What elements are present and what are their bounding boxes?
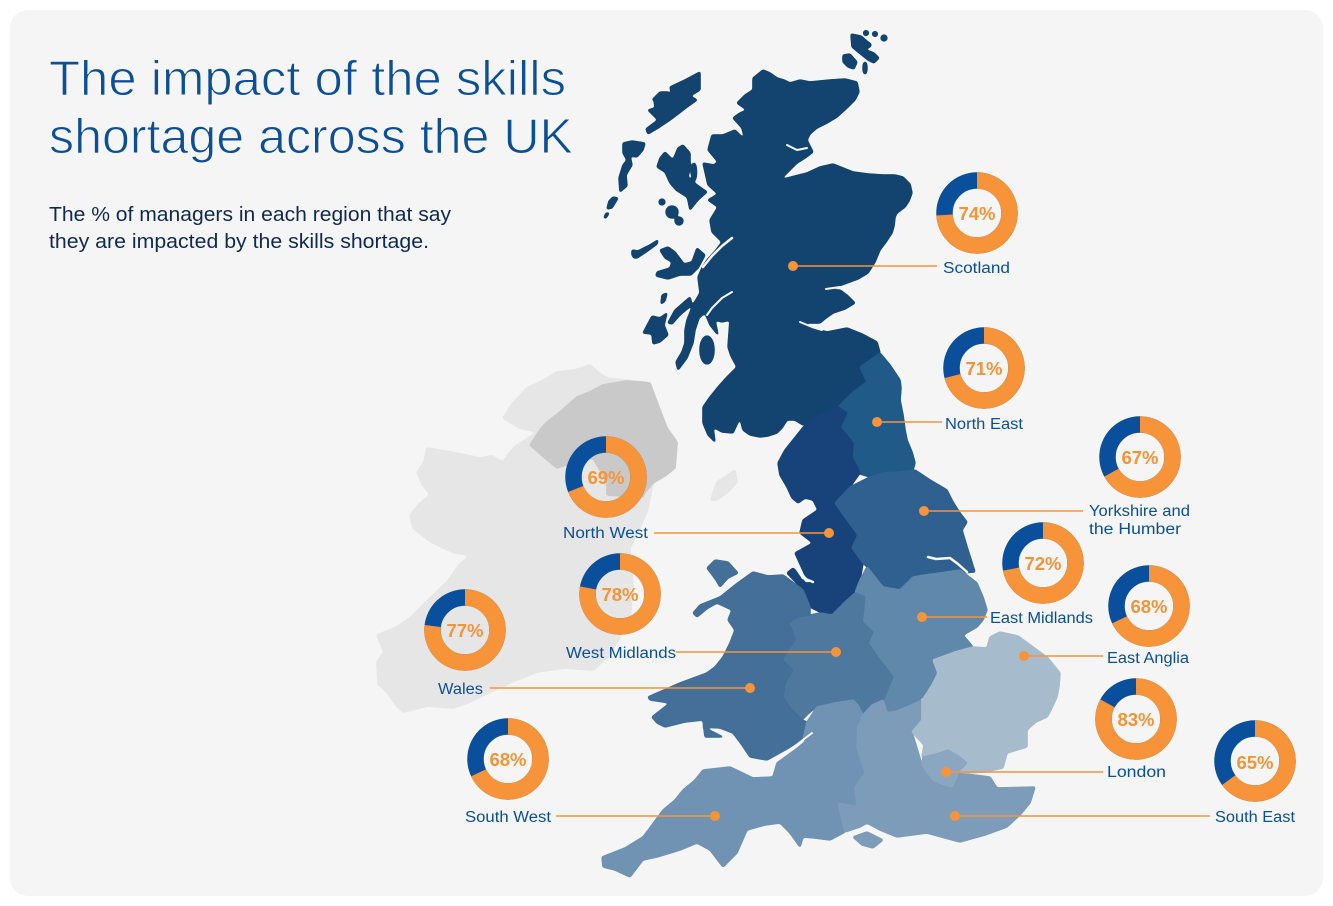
donut: East Anglia 68%: 68% (1130, 596, 1168, 617)
donut: West Midlands 78%: 78% (601, 584, 639, 605)
donut: Wales 77% (432, 598, 498, 662)
label: London: London (1107, 764, 1166, 781)
leader: Wales (490, 683, 755, 693)
donut: South East 65%: 65% (1236, 752, 1274, 773)
region: Northern Ireland (530, 381, 677, 497)
leader: South West (556, 811, 720, 821)
estuaries and sea lochs (703, 145, 967, 757)
island: Skye (657, 145, 707, 210)
leader: East Midlands (917, 612, 987, 622)
island: Jura (661, 293, 692, 324)
subtitle: they are impacted by the skills shortage. (49, 231, 429, 253)
region: East Midlands (855, 567, 987, 713)
map: Ireland (377, 365, 737, 712)
leader: North West (654, 528, 834, 538)
donut: Yorkshire and the Humber 67% (1108, 424, 1172, 490)
donut: North East 71%: 71% (965, 358, 1003, 379)
region: East Anglia (912, 632, 1060, 773)
label: Scotland: Scotland (943, 260, 1010, 277)
donut: West Midlands 78% (588, 562, 652, 626)
island: Orkney (843, 30, 887, 74)
region: North East (838, 353, 915, 477)
label: East Anglia: East Anglia (1107, 650, 1189, 667)
label: South East: South East (1215, 809, 1296, 826)
title (49, 52, 573, 164)
island: Lewis and Harris (646, 72, 700, 134)
island: Islay (643, 313, 668, 344)
title: shortage across the UK (49, 110, 573, 164)
region: South East (838, 700, 1035, 842)
donut: Yorkshire and the Humber 67%: 67% (1121, 447, 1159, 468)
donut: North West 69% (574, 444, 638, 510)
donut: North East 71% (952, 336, 1016, 400)
donut: South West 68%: 68% (489, 749, 527, 770)
region: North West (778, 407, 863, 615)
label: North East: North East (945, 416, 1024, 433)
label: North West: North West (563, 525, 649, 542)
region: Wales (648, 560, 810, 760)
leader: Yorkshire and the Humber (919, 506, 1083, 516)
leader: London (941, 767, 1103, 777)
region: Yorkshire and the Humber (835, 470, 975, 590)
map: Great Britain regions (602, 30, 1060, 877)
region: Republic of Ireland (377, 365, 677, 712)
leader: Scotland (788, 261, 937, 271)
label: East Midlands: East Midlands (990, 610, 1093, 627)
island: Anglesey (707, 560, 738, 587)
title: The impact of the skills (49, 52, 566, 106)
donut: South West 68% (476, 726, 540, 792)
donut: South East 65% (1222, 728, 1288, 794)
donut: Wales 77%: 77% (446, 620, 484, 641)
donut: North West 69%: 69% (587, 467, 625, 488)
leader: East Anglia (1019, 651, 1103, 661)
region: Scotland (604, 30, 912, 442)
island: Mull (656, 247, 705, 279)
subtitle (49, 204, 451, 253)
label: West Midlands: West Midlands (566, 645, 676, 662)
donut: Scotland 74%: 74% (958, 203, 996, 224)
donut: London 83% (1104, 686, 1168, 752)
donut: East Midlands 72% (1010, 530, 1076, 596)
island: Arran (700, 336, 714, 364)
leader: South East (950, 811, 1210, 821)
label: South West: South West (465, 809, 552, 826)
island: Uists and Barra (604, 141, 645, 218)
island: Small Isles (659, 163, 696, 225)
label: Wales: Wales (438, 681, 483, 698)
leader: North East (872, 417, 942, 427)
donut: London 83%: 83% (1117, 709, 1155, 730)
island: Isle of Wight (853, 832, 883, 848)
island: Isle of Man (711, 470, 737, 500)
subtitle: The % of managers in each region that say (49, 204, 451, 226)
leader: West Midlands (676, 647, 841, 657)
donut: East Midlands 72%: 72% (1024, 553, 1062, 574)
label: Yorkshire and the Humber: the Humber (1089, 521, 1181, 538)
region: South West (602, 700, 865, 877)
label: Yorkshire and the Humber (1089, 503, 1190, 538)
region: London (922, 750, 967, 787)
donut: Scotland 74% (944, 180, 1010, 246)
donut: East Anglia 68% (1116, 574, 1182, 638)
label: Yorkshire and the Humber: Yorkshire and (1089, 503, 1190, 520)
island: Coll and Tiree (632, 240, 658, 258)
region: West Midlands (782, 593, 893, 720)
